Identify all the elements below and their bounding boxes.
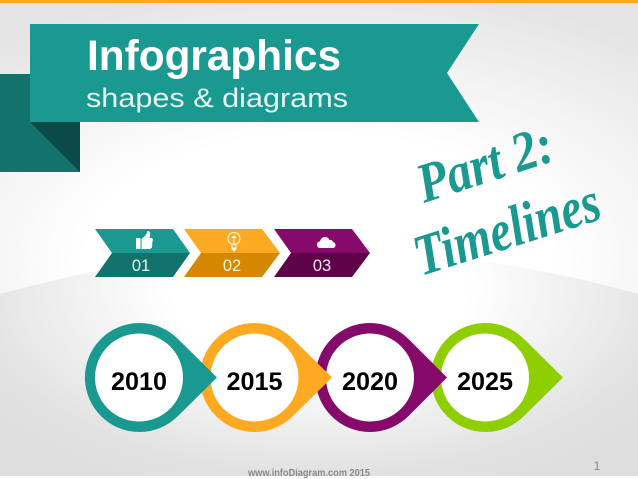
Part 2: Part 2: — [408, 113, 561, 216]
page number: 1 — [594, 459, 601, 473]
icon: light bulb — [228, 232, 240, 251]
chevron 03 — [274, 229, 370, 277]
ribbon fold back — [0, 74, 80, 172]
ribbon fold shadow — [30, 122, 80, 172]
timeline of teardrop circles — [85, 323, 563, 432]
chevron process: 01 02 03 — [95, 229, 370, 277]
milestone 2015 — [200, 323, 332, 432]
label 01: 01 — [132, 257, 150, 275]
chevron 01 — [95, 229, 190, 277]
icon: thumbs up — [136, 231, 153, 249]
ribbon front — [30, 24, 479, 122]
title ribbon — [0, 24, 479, 172]
label 03: 03 — [313, 257, 331, 275]
title heading: Infographics — [87, 32, 341, 80]
top accent bar — [0, 0, 638, 3]
milestone 2025 — [431, 323, 563, 432]
milestone 2020: 2020 — [342, 368, 398, 396]
subtitle: shapes & diagrams — [86, 83, 348, 113]
milestone 2025: 2025 — [457, 368, 513, 396]
footer website text: www.infoDiagram.com 2015 — [247, 467, 370, 479]
milestone 2015: 2015 — [226, 368, 283, 396]
milestone 2010: 2010 — [111, 368, 167, 396]
milestone 2010 — [85, 323, 217, 432]
handwritten heading: Part 2: Timelines — [405, 113, 608, 288]
milestone 2020 — [315, 323, 447, 432]
label 02: 02 — [223, 257, 241, 275]
chevron 02 — [184, 229, 280, 277]
icon: cloud — [317, 237, 336, 248]
